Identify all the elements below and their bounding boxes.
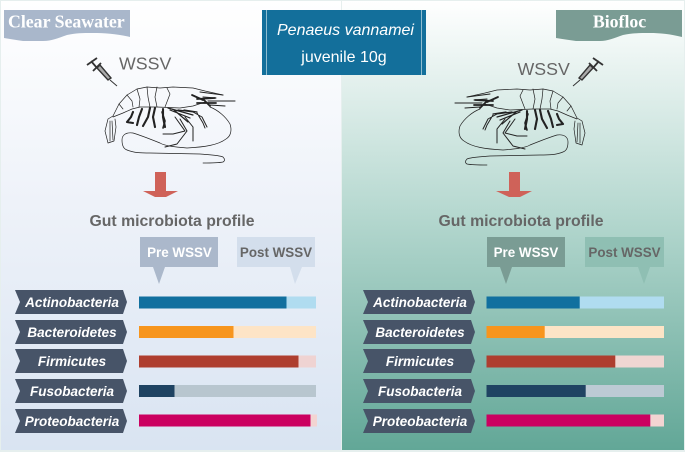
bar: Fusobacteria [486, 385, 664, 397]
heading: gut profile right: Gut microbiota profile [438, 213, 604, 230]
label: Actinobacteria [15, 290, 127, 314]
label: Proteobacteria: Proteobacteria [25, 414, 120, 429]
icon: syringe right [573, 58, 603, 86]
label: Firmicutes [363, 349, 475, 373]
labels: phyla left [15, 290, 127, 433]
label: Proteobacteria [15, 409, 127, 433]
label: Proteobacteria [363, 409, 475, 433]
callout: Post WSSV right: Post WSSV [588, 245, 661, 260]
banner: Clear Seawater [4, 10, 130, 41]
icon: shrimp left [105, 87, 235, 163]
arrow: left [143, 172, 178, 197]
label: Fusobacteria [363, 379, 475, 403]
bar: Firmicutes [139, 356, 316, 368]
bar: Actinobacteria [139, 296, 316, 308]
label: Actinobacteria: Actinobacteria [372, 295, 467, 310]
label: Fusobacteria [15, 379, 127, 403]
arrow: right [496, 172, 532, 197]
callout: Post WSSV left [237, 237, 315, 284]
label: Fusobacteria: Fusobacteria [378, 384, 463, 399]
icon: syringe left [87, 58, 117, 86]
bar: Proteobacteria [139, 414, 317, 426]
labels: phyla right [363, 290, 475, 433]
callout: Pre WSSV right [487, 237, 565, 284]
label: Bacteroidetes [15, 320, 127, 344]
label: Firmicutes: Firmicutes [386, 354, 455, 369]
label: Actinobacteria: Actinobacteria [24, 295, 119, 310]
title box: species and size [262, 10, 426, 75]
label: WSSV left: WSSV [119, 54, 172, 74]
bar: Firmicutes [486, 356, 664, 368]
panel: clear seawater [1, 1, 341, 450]
callout: Pre WSSV left: Pre WSSV [147, 245, 212, 260]
label: Bacteroidetes: Bacteroidetes [375, 325, 465, 340]
label: Proteobacteria: Proteobacteria [373, 414, 468, 429]
bar chart: clear seawater [139, 296, 317, 426]
callout: Post WSSV right [585, 237, 664, 284]
label: Actinobacteria [363, 290, 475, 314]
bar chart: biofloc [486, 296, 664, 426]
callout: Pre WSSV right: Pre WSSV [494, 245, 558, 260]
banner: Biofloc: Biofloc [593, 12, 646, 32]
banner: Biofloc [556, 10, 682, 41]
bar: Actinobacteria [486, 296, 664, 308]
bar: Fusobacteria [139, 385, 316, 397]
title box: species and size: juvenile 10g [300, 49, 387, 66]
bar: Bacteroidetes [486, 326, 664, 338]
heading: gut profile left: Gut microbiota profile [90, 213, 255, 230]
label: Firmicutes: Firmicutes [38, 354, 107, 369]
label: Bacteroidetes: Bacteroidetes [27, 325, 117, 340]
callout: Pre WSSV left [140, 237, 218, 284]
icon: shrimp right [455, 89, 585, 165]
label: Bacteroidetes [363, 320, 475, 344]
label: WSSV right: WSSV [518, 59, 570, 79]
bar: Proteobacteria [486, 414, 664, 426]
panel: biofloc [342, 1, 684, 450]
banner: Clear Seawater: Clear Seawater [8, 12, 125, 32]
label: Fusobacteria: Fusobacteria [30, 384, 115, 399]
bar: Bacteroidetes [139, 326, 316, 338]
label: Firmicutes [15, 349, 127, 373]
callout: Post WSSV left: Post WSSV [240, 245, 312, 260]
title box: species and size: Penaeus vannamei [277, 22, 414, 39]
